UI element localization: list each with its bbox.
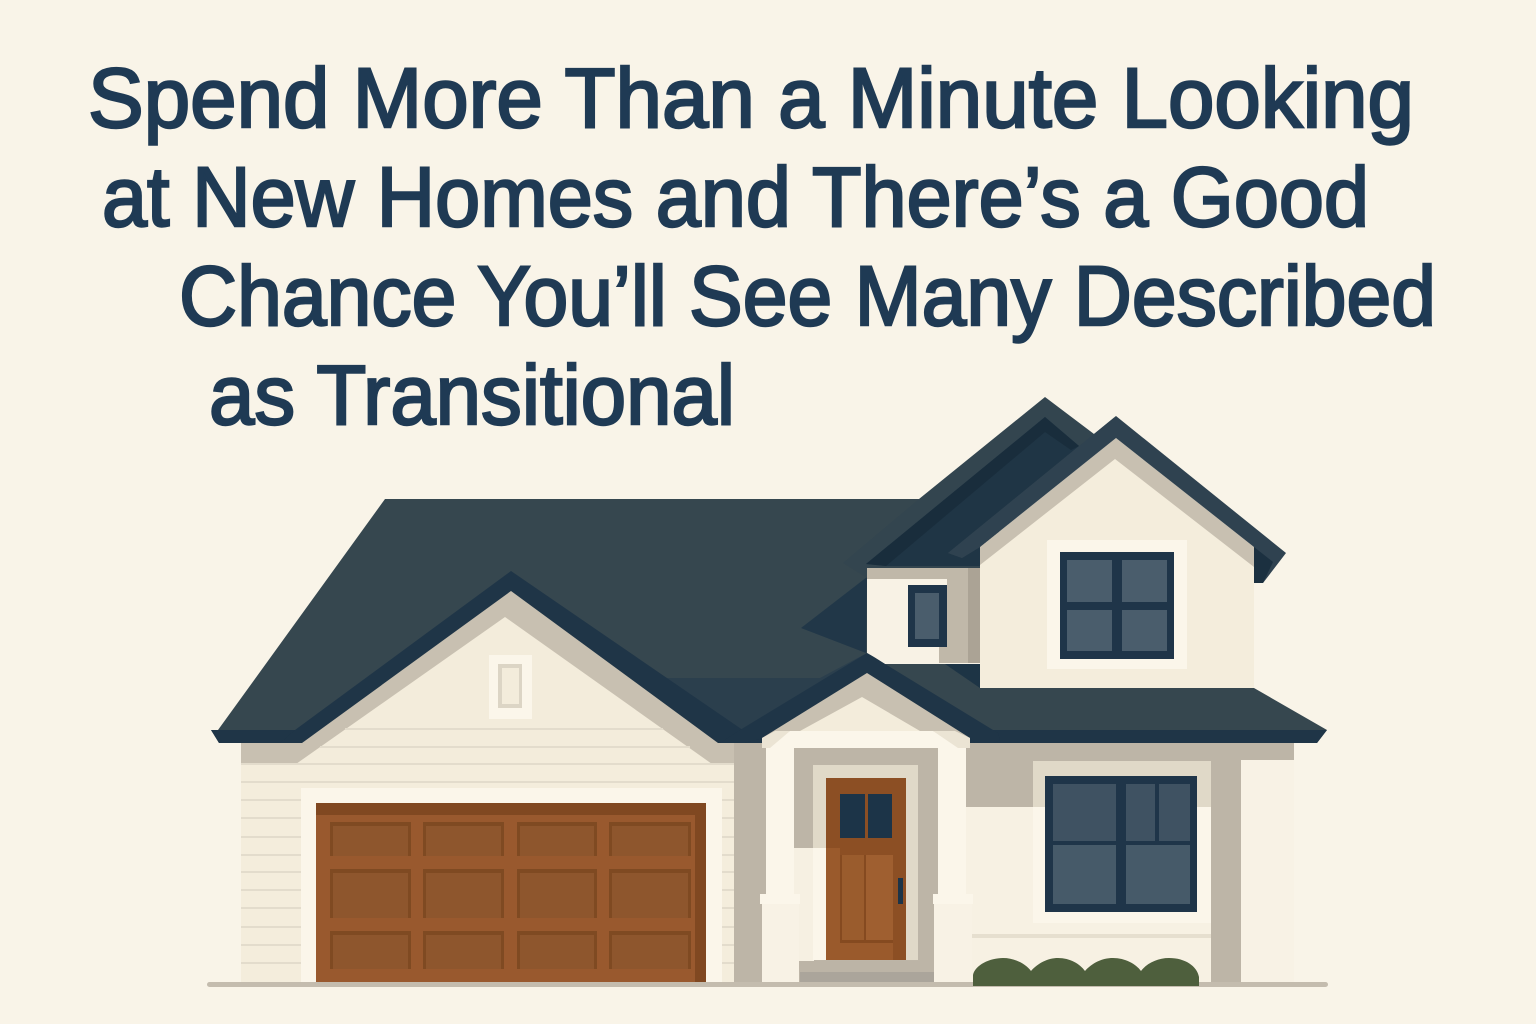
right column	[933, 748, 973, 982]
door	[826, 778, 906, 960]
ground floor walls	[241, 743, 1294, 982]
porch gable	[720, 653, 1000, 748]
title: Spend More Than a Minute Looking	[88, 51, 1414, 145]
house illustration	[207, 397, 1328, 987]
porch and front door	[760, 748, 973, 982]
title: at New Homes and There’s a Good	[102, 150, 1369, 244]
upper gable roof band	[948, 416, 1286, 583]
upper window	[1047, 540, 1187, 669]
large front window	[1033, 761, 1211, 923]
title: Chance You’ll See Many Described	[179, 249, 1436, 343]
main roof	[211, 499, 1327, 743]
garage roof gable band	[280, 571, 750, 743]
title: as Transitional	[209, 348, 735, 442]
title	[88, 51, 1436, 442]
dormer small window	[908, 585, 947, 647]
garage gable	[241, 591, 734, 765]
shrubs	[973, 958, 1199, 986]
left column	[760, 748, 800, 982]
steps	[800, 961, 920, 972]
upper front gable wall	[980, 438, 1254, 688]
garage door	[241, 781, 734, 982]
dormer side wall	[867, 568, 980, 663]
gable vent	[489, 655, 532, 719]
ground line	[207, 982, 1328, 987]
upper rear roof	[843, 397, 1116, 578]
